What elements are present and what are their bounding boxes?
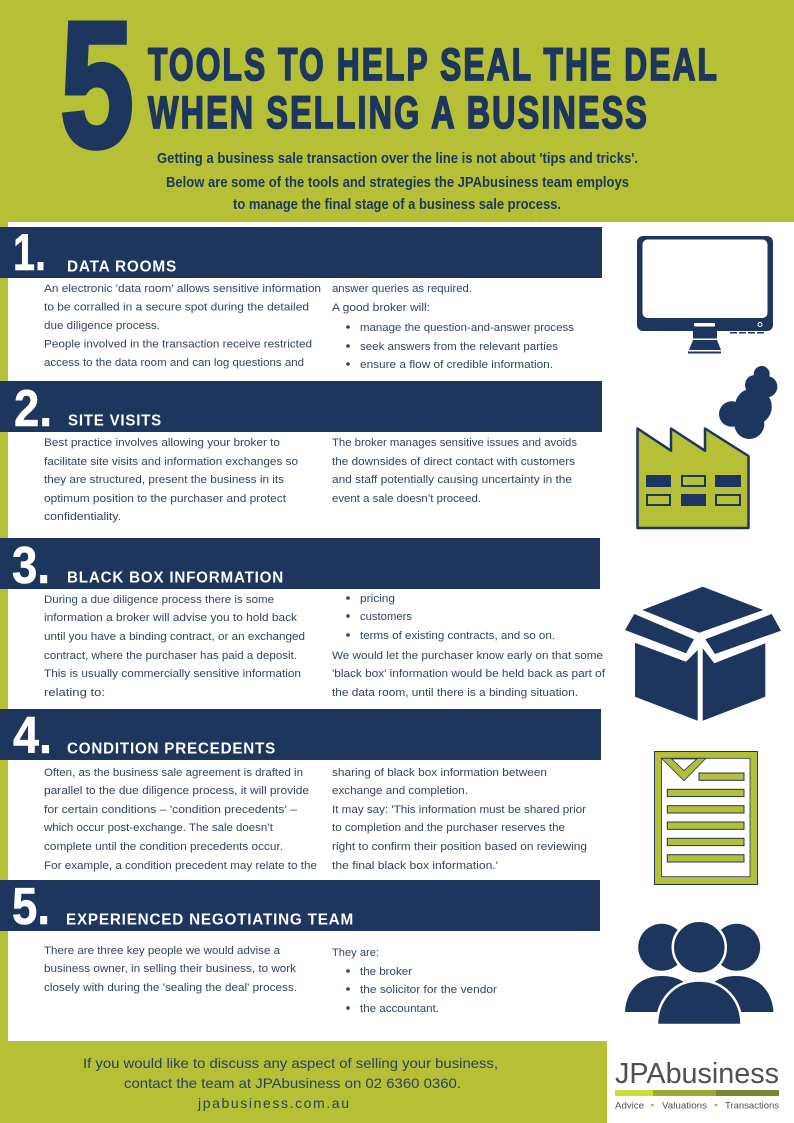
heading bar 4: CONDITION PRECEDENTS: [67, 740, 276, 758]
icon: three people: [620, 921, 780, 1028]
negotiating team left column: closely with during the 'sealing the deal' process.: [44, 982, 297, 994]
logo: JPAbusiness: [615, 1058, 779, 1112]
condition precedents left column: for certain conditions – 'condition precedents' –: [44, 804, 298, 816]
condition precedents left column: complete until the condition precedents occur.: [44, 841, 283, 853]
data rooms left column: access to the data room and can log questions and: [44, 357, 304, 369]
condition precedents right column: exchange and completion.: [332, 785, 468, 797]
intro text: [157, 150, 638, 213]
heading bar 1: 1.: [13, 224, 46, 282]
icon: computer monitor: [637, 236, 773, 354]
black box right column: terms of existing contracts, and so on.: [360, 630, 555, 642]
condition precedents right column: It may say: 'This information must be shared prior: [332, 804, 586, 816]
condition precedents right column: [332, 767, 587, 872]
site visits right column: the downsides of direct contact with customers: [332, 456, 576, 468]
negotiating team right column: They are:: [332, 947, 379, 959]
black box left column: relating to:: [44, 687, 105, 699]
panel: experienced negotiating team: [0, 878, 600, 1015]
condition precedents left column: [43, 767, 317, 872]
negotiating team left column: [44, 945, 297, 994]
data rooms left column: to be corralled in a secure spot during the detailed: [44, 302, 309, 314]
negotiating team left column: There are three key people we would advise a: [44, 945, 281, 957]
heading bar 3: 3.: [12, 537, 50, 595]
intro text: Getting a business sale transaction over the line is not about 'tips and tricks'.: [157, 150, 638, 167]
condition precedents right column: the final black box information.': [332, 860, 498, 872]
logo: JPAbusiness: Advice: [615, 1100, 644, 1112]
heading bar 5: EXPERIENCED NEGOTIATING TEAM: [66, 912, 354, 928]
black box left column: During a due diligence process there is some: [44, 594, 274, 606]
data rooms right column: A good broker will:: [332, 302, 430, 314]
heading bar 2: 2.: [14, 380, 52, 438]
data rooms right column: answer queries as required.: [332, 283, 472, 295]
data rooms right column: ensure a flow of credible information.: [360, 359, 553, 371]
condition precedents left column: parallel to the due diligence process, it will provide: [44, 785, 309, 797]
black box right column: pricing: [360, 593, 395, 605]
panel: black box information: [0, 537, 606, 699]
panel: data rooms: [0, 224, 602, 371]
site visits left column: [44, 437, 298, 523]
heading bar 5: [0, 878, 600, 936]
negotiating team right column: [332, 947, 497, 1015]
heading bar 2: SITE VISITS: [68, 412, 162, 430]
site visits left column: optimum position to the purchaser and protect: [44, 493, 286, 505]
data rooms right column: manage the question-and-answer process: [360, 322, 575, 334]
site visits left column: facilitate site visits and information exchanges so: [44, 456, 298, 468]
logo: JPAbusiness: JPAbusiness: [615, 1058, 779, 1090]
condition precedents left column: which occur post-exchange. The sale doesn’t: [43, 822, 273, 834]
site visits left column: confidentiality.: [44, 511, 121, 523]
heading bar 3: BLACK BOX INFORMATION: [67, 570, 284, 586]
icon: document checklist: [654, 752, 758, 884]
intro text: to manage the final stage of a business sale process.: [233, 196, 561, 213]
condition precedents right column: right to confirm their position based on reviewing: [332, 841, 587, 853]
logo: JPAbusiness: Transactions: [725, 1100, 779, 1112]
heading bar 3: [0, 537, 600, 595]
data rooms left column: People involved in the transaction receive restricted: [44, 338, 312, 350]
icon: factory with smoke: [638, 366, 777, 528]
negotiating team left column: business owner, in selling their business, to work: [44, 963, 297, 975]
black box left column: This is usually commercially sensitive information: [44, 668, 301, 680]
logo: JPAbusiness: Valuations: [662, 1100, 707, 1112]
site visits left column: Best practice involves allowing your broker to: [44, 437, 280, 449]
black box right column: [332, 593, 606, 699]
site visits right column: [332, 437, 578, 505]
heading bar 4: [0, 707, 601, 765]
negotiating team right column: the solicitor for the vendor: [360, 984, 497, 996]
data rooms left column: due diligence process.: [44, 320, 160, 332]
condition precedents right column: to completion and the purchaser reserves the: [332, 822, 565, 834]
heading bar 4: 4.: [13, 707, 52, 765]
footer contact text: contact the team at JPAbusiness on 02 6360 0360.: [124, 1075, 461, 1091]
panel: condition precedents: [0, 707, 601, 872]
site visits right column: event a sale doesn’t proceed.: [332, 493, 481, 505]
black box left column: contract, where the purchaser has paid a deposit.: [44, 650, 297, 662]
heading bar 1: DATA ROOMS: [67, 258, 177, 276]
black box right column: the data room, until there is a binding situation.: [332, 687, 578, 699]
data rooms right column: [332, 283, 575, 371]
site visits right column: and staff potentially causing uncertainty in the: [332, 474, 572, 486]
intro text: Below are some of the tools and strategies the JPAbusiness team employs: [166, 174, 629, 191]
panel: site visits: [0, 380, 602, 523]
negotiating team right column: the broker: [360, 966, 412, 978]
site visits right column: The broker manages sensitive issues and avoids: [332, 437, 578, 449]
footer contact text: If you would like to discuss any aspect of selling your business,: [83, 1055, 498, 1071]
black box right column: customers: [360, 611, 412, 623]
footer contact text: [83, 1055, 498, 1111]
black box left column: until you have a binding contract, or an exchanged: [44, 631, 305, 643]
site visits left column: they are structured, present the business in its: [44, 474, 285, 486]
black box left column: [44, 594, 305, 699]
data rooms right column: seek answers from the relevant parties: [360, 341, 559, 353]
condition precedents left column: Often, as the business sale agreement is drafted in: [44, 767, 303, 779]
black box right column: 'black box' information would be held back as part of: [332, 668, 606, 680]
heading bar 2: [0, 380, 602, 438]
data rooms left column: [44, 283, 321, 369]
footer contact text: jpabusiness.com.au: [197, 1095, 349, 1111]
black box right column: We would let the purchaser know early on that some: [332, 650, 603, 662]
condition precedents right column: sharing of black box information between: [332, 767, 547, 779]
title: [148, 39, 719, 138]
black box left column: information a broker will advise you to hold back: [44, 612, 298, 624]
condition precedents left column: For example, a condition precedent may relate to the: [44, 860, 317, 872]
icon: open box: [625, 587, 781, 721]
heading bar 5: 5.: [12, 878, 50, 936]
heading bar 1: [0, 224, 602, 282]
negotiating team right column: the accountant.: [360, 1003, 439, 1015]
data rooms left column: An electronic 'data room' allows sensitive information: [44, 283, 321, 295]
